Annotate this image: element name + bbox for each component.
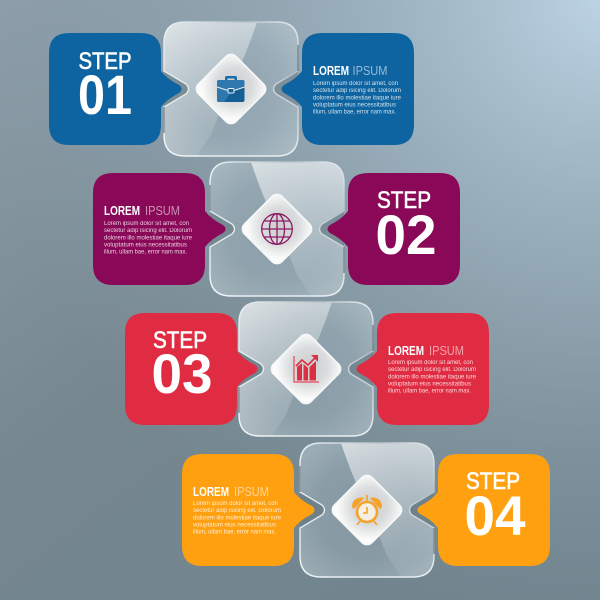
icon: briefcase bbox=[194, 52, 268, 126]
card: step 01: 01 bbox=[78, 63, 132, 126]
glass panel 4 bbox=[300, 440, 437, 580]
card: lorem ipsum 1: voluptatum eius necessitatibus bbox=[313, 102, 396, 108]
card: lorem ipsum 1: Lorem ipsum dolor sit amet, con bbox=[313, 81, 398, 87]
card: lorem ipsum 1: IPSUM bbox=[352, 64, 388, 78]
card: lorem ipsum 3: dolorem illo molestiae itaque iure bbox=[388, 374, 477, 380]
card: lorem ipsum 3: LOREM bbox=[388, 344, 424, 358]
card: lorem ipsum 2: voluptatum eius necessitatibus bbox=[104, 242, 187, 248]
card: lorem ipsum 1 bbox=[282, 33, 414, 145]
card: lorem ipsum 4 bbox=[182, 454, 314, 566]
glass panel 2 bbox=[210, 159, 347, 299]
card: step 02 bbox=[328, 173, 460, 285]
icon: alarm clock bbox=[330, 473, 404, 547]
card: lorem ipsum 3: Lorem ipsum dolor sit amet, con bbox=[388, 360, 473, 366]
card: lorem ipsum 2 bbox=[93, 173, 226, 285]
card: lorem ipsum 3 bbox=[356, 313, 489, 425]
card: step 04: STEP bbox=[466, 468, 520, 495]
card: step 01 bbox=[49, 33, 182, 145]
card: step 04 bbox=[418, 454, 550, 566]
card: lorem ipsum 1: sectetur adip isicing elit. Dolorum bbox=[313, 88, 401, 94]
glass panel 3 bbox=[236, 299, 373, 439]
card: lorem ipsum 2: dolorem illo molestiae itaque iure bbox=[104, 235, 193, 241]
card: step 03 bbox=[125, 313, 258, 425]
step 01 row bbox=[49, 19, 414, 159]
card: lorem ipsum 4: IPSUM bbox=[234, 485, 269, 499]
card: lorem ipsum 4: sectetur adip isicing elit. Dolorum bbox=[193, 508, 281, 514]
step 02 row bbox=[93, 159, 460, 299]
step 04 row bbox=[182, 440, 550, 580]
card: lorem ipsum 3: voluptatum eius necessitatibus bbox=[388, 381, 471, 387]
icon: globe bbox=[240, 192, 314, 266]
card: step 04: 04 bbox=[464, 484, 526, 547]
card: lorem ipsum 2: illum, ullam bae, error nam max. bbox=[104, 250, 187, 256]
card: lorem ipsum 4: illum, ullam bae, error nam max. bbox=[193, 530, 276, 536]
card: lorem ipsum 4: voluptatum eius necessitatibus bbox=[193, 522, 276, 528]
card: step 02: STEP bbox=[377, 187, 431, 214]
icon: growth chart bbox=[269, 332, 343, 406]
card: lorem ipsum 2: IPSUM bbox=[145, 204, 180, 218]
card: lorem ipsum 4: dolorem illo molestiae itaque iure bbox=[193, 515, 282, 521]
card: step 03: STEP bbox=[153, 327, 207, 354]
glass panel 1 bbox=[161, 19, 298, 159]
card: lorem ipsum 2: sectetur adip isicing elit. Dolorum bbox=[104, 228, 192, 234]
card: lorem ipsum 1: dolorem illo molestiae itaque iure bbox=[313, 95, 402, 101]
card: lorem ipsum 2: Lorem ipsum dolor sit amet, con bbox=[104, 221, 189, 227]
card: step 01: STEP bbox=[78, 48, 132, 75]
card: lorem ipsum 3: sectetur adip isicing elit. Dolorum bbox=[388, 367, 476, 373]
card: lorem ipsum 4: Lorem ipsum dolor sit amet, con bbox=[193, 501, 278, 507]
card: lorem ipsum 4: LOREM bbox=[193, 485, 229, 499]
card: lorem ipsum 3: illum, ullam bae, error nam max. bbox=[388, 388, 471, 394]
card: step 03: 03 bbox=[152, 342, 212, 405]
card: lorem ipsum 1: LOREM bbox=[313, 64, 349, 78]
card: lorem ipsum 1: illum, ullam bae, error nam max. bbox=[313, 110, 396, 116]
card: lorem ipsum 3: IPSUM bbox=[429, 344, 464, 358]
step 03 row bbox=[125, 299, 489, 439]
card: lorem ipsum 2: LOREM bbox=[104, 204, 140, 218]
card: step 02: 02 bbox=[376, 203, 436, 266]
